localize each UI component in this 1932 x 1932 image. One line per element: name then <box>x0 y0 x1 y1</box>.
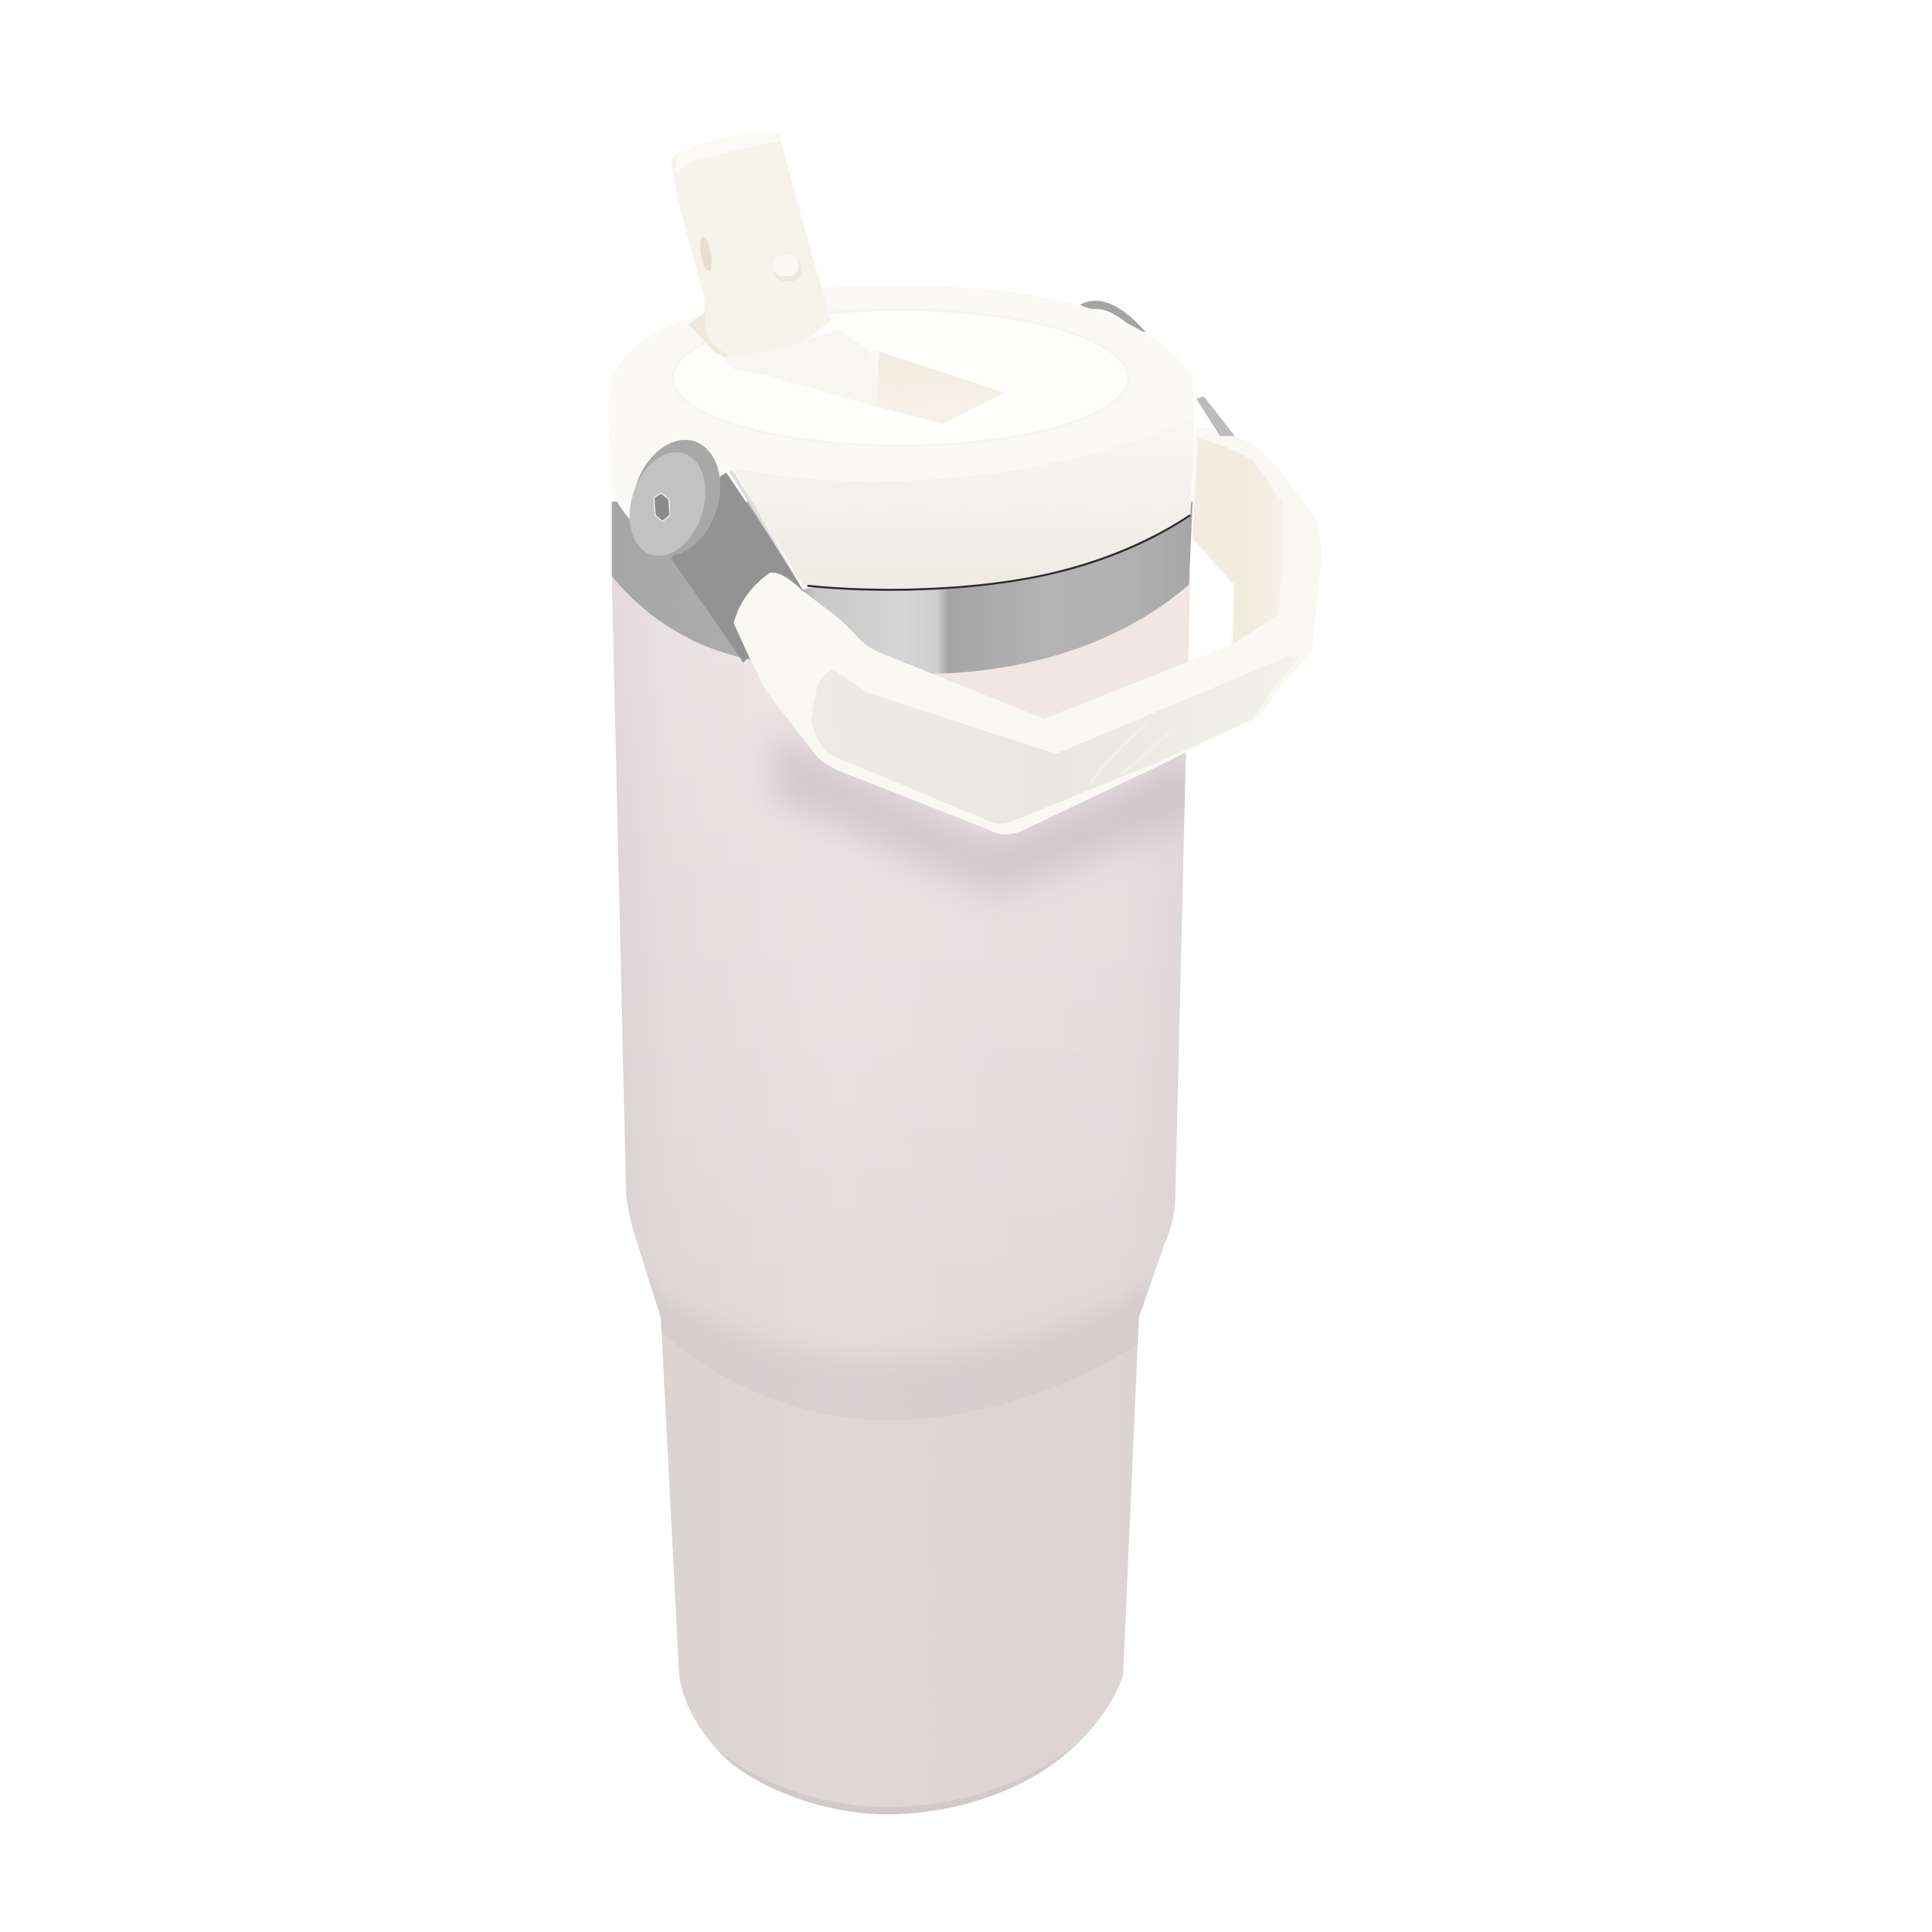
body: upper section <box>612 577 1186 1353</box>
body: pink glow inside handle <box>1152 575 1190 676</box>
bolt: hex socket <box>654 493 670 521</box>
lid <box>608 285 1195 589</box>
lid: straw opening <box>875 352 1004 423</box>
rear metal clips <box>1080 301 1235 436</box>
handle: rear band behind body <box>1192 429 1320 685</box>
lid: cream side wall <box>733 419 1194 589</box>
body: tapered shoulder band <box>648 1265 1158 1343</box>
steel arm of handle <box>671 468 805 663</box>
strap: recessed panel <box>811 657 1300 823</box>
lid: lower edge shadow line <box>808 515 1190 589</box>
straw: small dimple <box>698 236 714 272</box>
body: shadow under handle <box>774 731 1195 894</box>
flip straw <box>671 133 831 355</box>
steel collar <box>612 468 1192 675</box>
body: lower section <box>611 577 1186 1814</box>
body: side edge shading <box>612 577 1185 1226</box>
tumbler body <box>611 575 1190 1814</box>
straw: peg <box>773 255 801 281</box>
lid: white top and rim <box>608 285 1195 589</box>
strap: faint embossed logo <box>1090 723 1171 784</box>
lid: opening sliver <box>866 348 879 406</box>
lid: straw hinge <box>725 330 875 406</box>
lid: straw notch <box>688 309 743 365</box>
body: base edge shade <box>715 1743 1078 1814</box>
lid: top recess <box>672 309 1128 446</box>
illustration: insulated tumbler with flip straw and carry handle <box>608 133 1321 1814</box>
pivot bolt <box>617 429 734 568</box>
handle strap: front <box>736 574 1312 832</box>
